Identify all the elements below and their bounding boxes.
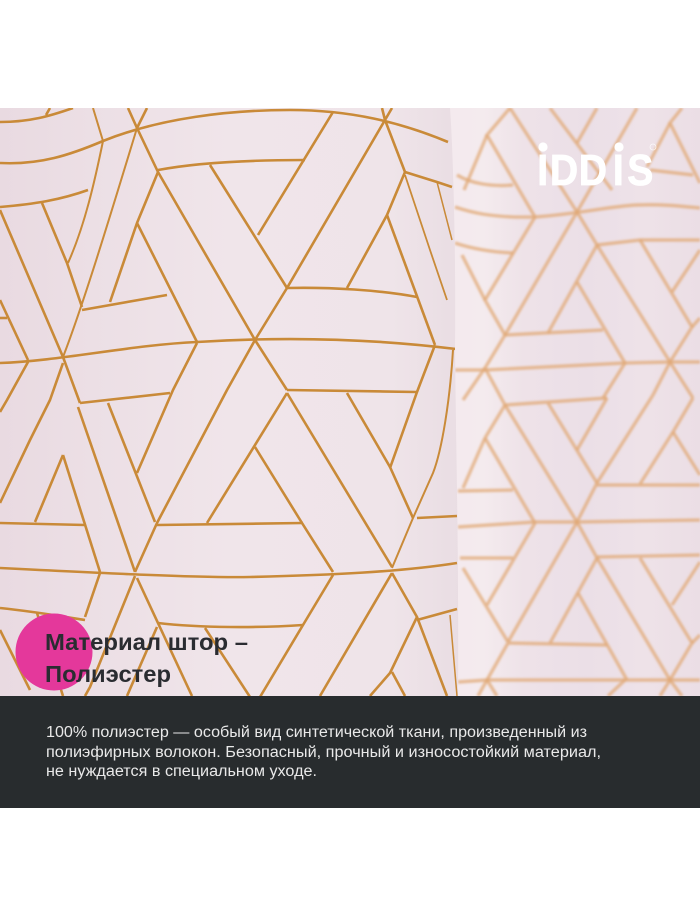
heading: [45, 629, 248, 687]
logo wordmark: I: [613, 146, 624, 194]
pink accent circle: [16, 614, 92, 690]
logo wordmark: D: [550, 146, 578, 194]
infographic canvas: [0, 108, 700, 808]
description text: не нуждается в специальном уходе.: [46, 763, 317, 780]
logo wordmark: S: [627, 146, 653, 194]
logo wordmark: D: [579, 146, 607, 194]
back curtain fabric: [430, 108, 700, 696]
photo: shower curtain: [0, 108, 700, 697]
front curtain fabric: [0, 108, 460, 697]
description panel: [0, 696, 700, 808]
heading: Материал штор –: [45, 629, 248, 655]
logo wordmark: I: [537, 146, 548, 194]
description text: полиэфирных волокон. Безопасный, прочный и износостойкий материал,: [46, 744, 601, 761]
description text: [46, 724, 601, 780]
back curtain blurred pattern: [455, 108, 700, 696]
logo registered mark: [650, 144, 656, 150]
description text: 100% полиэстер — особый вид синтетической ткани, произведенный из: [46, 724, 587, 741]
front curtain gold geometric pattern: [0, 108, 457, 697]
heading: Полиэстер: [45, 661, 171, 687]
logo: IDDIS: [537, 142, 656, 194]
logo i dots: [538, 142, 624, 152]
